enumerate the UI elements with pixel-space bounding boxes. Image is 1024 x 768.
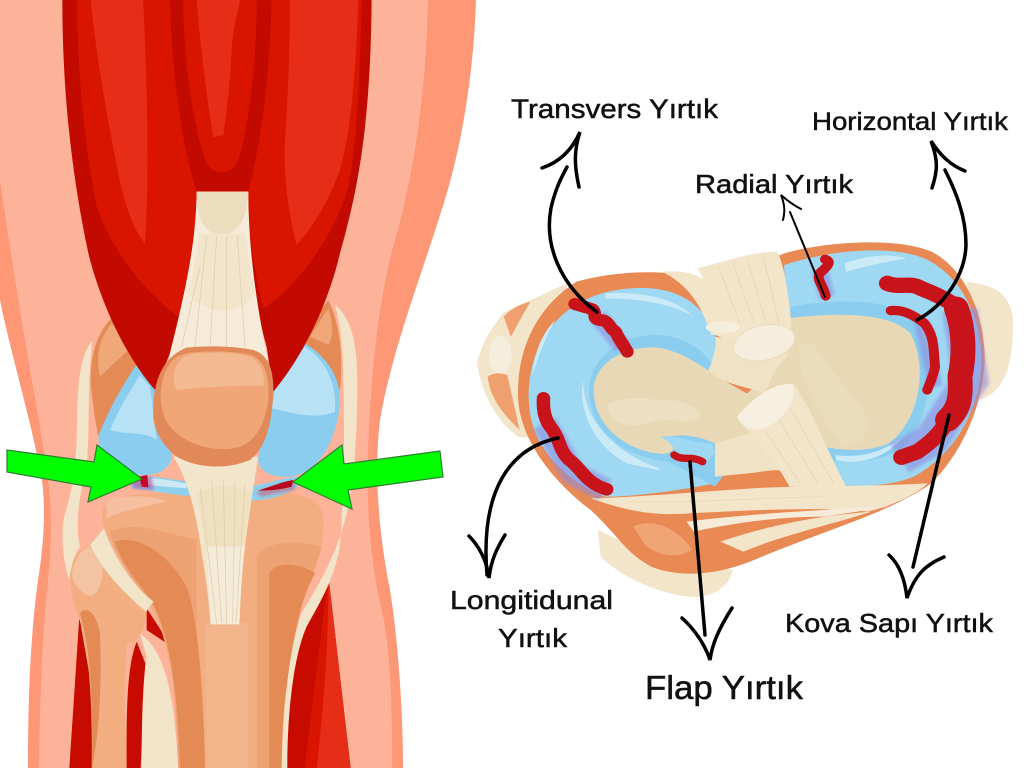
bottom fibres xyxy=(598,530,733,597)
lower cruciate fibres xyxy=(715,433,782,477)
meniscus rim xyxy=(589,335,761,487)
label: longitudinal tear second line: Yırtık xyxy=(498,623,568,653)
meniscus highlights xyxy=(845,256,907,272)
arrow: bucket handle xyxy=(889,415,949,598)
orange wedge lower xyxy=(488,373,520,430)
meniscus left xyxy=(529,288,715,497)
label: bucket handle tear: Kova Sapı Yırtık xyxy=(785,608,994,638)
arrow: radial xyxy=(781,195,825,297)
femur condyle left xyxy=(91,317,140,443)
meniscus right xyxy=(784,250,981,486)
plateau shade xyxy=(607,398,701,425)
arrow: transverse xyxy=(542,132,597,312)
label: flap tear: Flap Yırtık xyxy=(645,669,804,706)
tear: horizontal xyxy=(891,310,935,390)
tear: radial xyxy=(819,259,829,296)
arrow: longitudinal xyxy=(469,438,558,578)
tear: bucket handle outer xyxy=(887,283,965,457)
label: horizontal tear: Horizontal Yırtık xyxy=(812,108,1009,136)
anterior horn wedge xyxy=(711,470,786,492)
posterior cruciate stump xyxy=(697,252,791,357)
anterior cruciate xyxy=(737,383,846,487)
quadriceps muscle xyxy=(62,0,372,392)
lower medial tendon xyxy=(140,633,178,768)
tibia xyxy=(102,493,324,768)
tibial plateau xyxy=(594,315,920,454)
panel: meniscus top view xyxy=(450,94,1013,706)
side ligaments xyxy=(63,305,357,768)
capsule highlight xyxy=(633,523,692,555)
patellar ligament xyxy=(173,457,258,624)
back fibres left xyxy=(477,283,567,440)
ligament under stump xyxy=(709,337,790,393)
cream strip behind stump xyxy=(662,271,726,335)
femur condyle right xyxy=(300,300,341,390)
fibula xyxy=(70,547,147,768)
stump top xyxy=(729,319,799,367)
orange wedges xyxy=(504,302,530,337)
meniscus band xyxy=(132,476,190,496)
tear: flap xyxy=(674,455,703,462)
leg skin xyxy=(0,0,476,768)
front tear marks xyxy=(139,475,148,487)
panel: front view of knee xyxy=(0,0,476,768)
quadriceps tendon xyxy=(168,192,268,360)
fibres highlight xyxy=(489,336,512,374)
tear halos xyxy=(545,270,971,490)
capsule orange body xyxy=(518,242,985,574)
arrow: green right xyxy=(293,445,443,509)
arrow: green left xyxy=(7,445,142,502)
label: longitudinal tear: Longitidunal xyxy=(450,585,613,615)
label: radial tear: Radial Yırtık xyxy=(695,169,854,199)
anterior ligament bands xyxy=(591,483,928,514)
lower muscles xyxy=(69,575,351,768)
fibular strap xyxy=(90,528,153,612)
tear: transverse xyxy=(575,304,627,352)
arrow: flap xyxy=(682,462,732,660)
tear: longitudinal xyxy=(543,398,607,489)
front tear glow xyxy=(132,477,295,497)
blue flap xyxy=(661,436,715,463)
right fibres xyxy=(967,282,1013,400)
arrow: horizontal xyxy=(917,141,966,320)
patella xyxy=(153,346,273,467)
fluid sacs and meniscus xyxy=(98,343,340,500)
small stump end xyxy=(706,321,740,333)
knee bones xyxy=(70,300,341,768)
label: transverse tear: Transvers Yırtık xyxy=(511,94,719,124)
